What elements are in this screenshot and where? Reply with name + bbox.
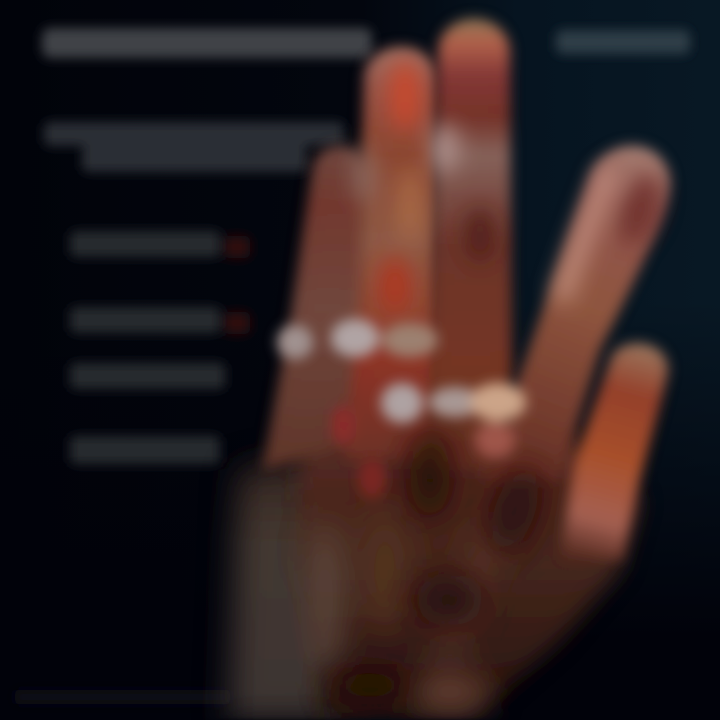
list item 4 — [70, 436, 220, 464]
list item 4: Wrist joint — [70, 440, 220, 460]
subtitle: Joints, fingers and common areas — [44, 125, 344, 147]
list item 2 — [70, 307, 250, 334]
finger: index — [262, 146, 372, 470]
highlights on fingers — [353, 59, 669, 313]
list item 3: Knuckle joint — [70, 366, 225, 386]
palm shadow streaks — [332, 431, 549, 699]
list item 2: Middle joint — [70, 310, 220, 330]
palm light streaks — [311, 510, 510, 712]
red joint marks — [331, 405, 386, 498]
footer text: Source information — [15, 692, 230, 706]
red marker — [224, 236, 250, 258]
top-right label: Diagram — [556, 32, 690, 54]
subtitle — [44, 122, 344, 172]
finger: ring — [425, 18, 512, 470]
list item 1: Fingertip joint — [70, 234, 220, 254]
footer text — [15, 690, 230, 706]
list item 1 — [70, 231, 250, 258]
finger: short right — [560, 343, 668, 560]
top-right label — [556, 30, 690, 54]
finger: middle — [345, 47, 440, 460]
red marker — [224, 312, 250, 334]
forearm — [228, 450, 345, 720]
palm — [300, 430, 640, 720]
white bands lower row — [381, 383, 526, 458]
background lower fade — [0, 300, 720, 720]
title: Hand Health Overview — [42, 28, 373, 58]
finger: long right — [480, 146, 670, 480]
white bands upper row — [277, 319, 438, 359]
illustration: hand — [228, 18, 670, 720]
subtitle: of the human hand — [82, 148, 307, 170]
list item 3 — [70, 363, 225, 389]
